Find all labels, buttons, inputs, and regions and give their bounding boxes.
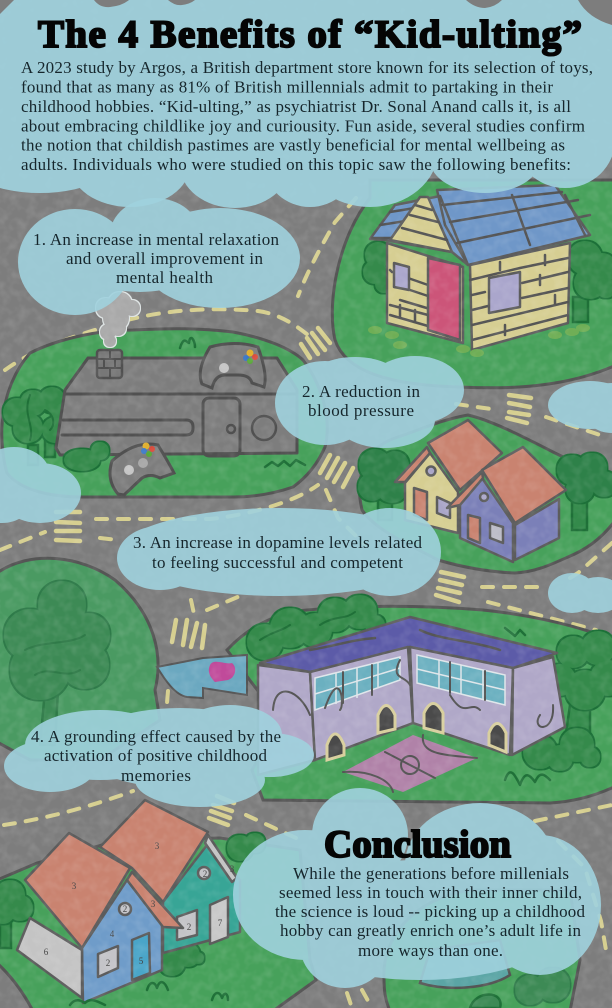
conclusion text: seemed less in touch with their inner child, xyxy=(279,883,582,902)
front house wall xyxy=(460,478,513,562)
console house xyxy=(56,292,305,495)
gray side wall xyxy=(17,918,82,998)
center wall left xyxy=(310,647,413,760)
rear roof xyxy=(100,800,208,902)
blue door xyxy=(132,933,150,980)
console door xyxy=(203,398,240,456)
front house eave xyxy=(447,472,483,508)
benefit 1 text: 1. An increase in mental relaxation xyxy=(33,230,280,249)
trees and shrubs xyxy=(0,241,612,1008)
school xyxy=(157,617,565,792)
grass xyxy=(180,338,305,467)
benefit 4 text: memories xyxy=(121,766,191,785)
blue circle xyxy=(119,903,131,915)
paint numbers: 3 xyxy=(155,841,160,851)
paint numbers: 4 xyxy=(110,929,115,939)
controller top xyxy=(200,344,265,388)
intro text: about embracing childlike joy and curiousity. Fun aside, several studies confirm xyxy=(21,116,585,136)
back house wall xyxy=(405,453,458,533)
smoke xyxy=(96,292,140,347)
grass xyxy=(505,628,550,785)
teal gable trim xyxy=(205,835,237,882)
paint numbers: 5 xyxy=(139,956,144,966)
tree: house one left xyxy=(363,242,393,293)
conclusion text: the science is loud -- picking up a childhood xyxy=(275,902,586,921)
benefit 3 text: 3. An increase in dopamine levels related xyxy=(133,533,422,552)
panel: left cloud xyxy=(0,447,81,523)
sport court xyxy=(343,735,477,792)
intro text: childhood hobbies. “Kid-ulting,” as psychiatrist Dr. Sonal Anand calls it, is all xyxy=(21,97,571,116)
panel: right cloud lower xyxy=(548,573,612,613)
front wall xyxy=(470,243,570,350)
side wall xyxy=(387,243,463,343)
benefit 2 text: blood pressure xyxy=(308,401,414,420)
front house door xyxy=(468,515,480,543)
gable xyxy=(390,197,452,252)
benefit 2 text xyxy=(302,382,420,420)
back house circle xyxy=(426,466,436,476)
left wing xyxy=(258,665,315,775)
blue window xyxy=(98,946,118,977)
paint numbers: 2 xyxy=(106,958,110,968)
back house eave xyxy=(395,447,430,482)
front roof xyxy=(25,833,130,948)
title: The 4 Benefits of “Kid-ulting” xyxy=(38,13,582,56)
lot: small houses xyxy=(360,415,612,573)
tree: mid house right xyxy=(557,453,612,530)
tree: school right xyxy=(523,631,612,771)
small eave xyxy=(127,872,183,928)
benefit 1 text: mental health xyxy=(116,268,214,287)
intro text xyxy=(21,58,593,174)
lot: school xyxy=(227,606,612,803)
right window xyxy=(489,272,520,313)
tree: bottom right xyxy=(470,968,570,1008)
panel: bubble 4 xyxy=(4,705,314,807)
intro text: adults. Individuals who were studied on this topic saw the following benefits: xyxy=(21,155,571,174)
lot: bottom left houses xyxy=(0,838,316,1008)
tree: bottom left xyxy=(0,880,33,948)
left window xyxy=(394,263,409,290)
windows right xyxy=(417,655,505,705)
intro text: found that as many as 81% of British millennials admit to partaking in their xyxy=(21,78,553,96)
flag xyxy=(157,655,247,698)
benefit 3 text: to feeling successful and competent xyxy=(152,553,403,572)
blue wall xyxy=(82,880,162,1003)
benefit 2 text: 2. A reduction in xyxy=(302,382,420,401)
panel: conclusion bubble xyxy=(233,788,601,988)
lot: console xyxy=(2,329,327,497)
grass xyxy=(70,982,228,1005)
panel: bubble 1 xyxy=(18,198,300,315)
back house roof xyxy=(428,420,502,490)
paint numbers: 2 xyxy=(203,869,207,879)
tree: school top bushes xyxy=(247,595,385,660)
teal window xyxy=(177,910,197,940)
benefit 4 text: 4. A grounding effect caused by the xyxy=(31,727,281,746)
shrubs xyxy=(368,324,590,357)
back house window xyxy=(437,497,450,518)
center wall right xyxy=(410,647,513,755)
benefit 3 text xyxy=(133,533,422,572)
controller bottom xyxy=(110,442,174,495)
benefit 1 text: and overall improvement in xyxy=(66,249,264,268)
chimney xyxy=(97,350,122,378)
mid houses xyxy=(395,420,566,562)
conclusion text: more ways than one. xyxy=(358,941,503,960)
teal circle xyxy=(198,867,210,879)
paint numbers: 2 xyxy=(187,922,191,932)
paint numbers: 3 xyxy=(230,864,235,874)
teal wall xyxy=(163,845,240,953)
benefit 1 text xyxy=(33,230,280,287)
pond xyxy=(420,940,510,988)
benefit 4 text xyxy=(31,727,281,785)
shrubs: bottom left xyxy=(159,833,265,976)
intro text: A 2023 study by Argos, a British department store known for its selection of toys, xyxy=(21,58,593,77)
panel: bubble 3 xyxy=(117,508,441,596)
paint numbers: 2 xyxy=(123,904,127,914)
paint numbers: 7 xyxy=(218,918,223,928)
lot: house one xyxy=(332,180,612,388)
lot: big tree xyxy=(0,558,160,760)
conclusion text: hobby can greatly enrich one’s adult life in xyxy=(280,921,582,940)
tree: big left xyxy=(4,581,110,745)
conclusion text xyxy=(275,864,586,960)
console body xyxy=(56,358,297,455)
school roof xyxy=(260,617,557,672)
intro text: the notion that childish pastimes are vastly beneficial for mental wellbeing as xyxy=(21,136,565,154)
back house door xyxy=(414,488,427,520)
tree: console left xyxy=(3,387,75,465)
paint numbers: 6 xyxy=(44,947,49,957)
front house side xyxy=(515,499,559,560)
paint numbers: 3 xyxy=(72,881,77,891)
front house window xyxy=(490,523,503,543)
front house roof xyxy=(482,447,566,523)
windows left xyxy=(315,657,400,710)
panel: bubble 2 xyxy=(275,356,464,448)
panel: right cloud upper xyxy=(548,381,612,433)
console buttons xyxy=(227,416,276,440)
front house circle xyxy=(480,493,488,501)
bottom left houses xyxy=(17,800,240,1005)
paint numbers: 3 xyxy=(151,899,156,909)
panel: header cloud xyxy=(0,0,612,208)
house one: brick cottage xyxy=(368,185,590,357)
teal door xyxy=(210,897,228,944)
conclusion heading: Conclusion xyxy=(324,823,511,866)
tree: house one right xyxy=(568,241,612,322)
lot: bottom right pond xyxy=(384,890,580,1008)
conclusion text: While the generations before millenials xyxy=(293,864,569,883)
shrub by controller xyxy=(64,442,109,471)
tree: mid house left xyxy=(358,449,409,520)
roof xyxy=(370,185,590,265)
right wing xyxy=(512,657,565,755)
arched doors xyxy=(327,704,506,760)
benefit 4 text: activation of positive childhood xyxy=(44,746,268,765)
paint numbers xyxy=(44,841,235,968)
door xyxy=(428,258,460,340)
